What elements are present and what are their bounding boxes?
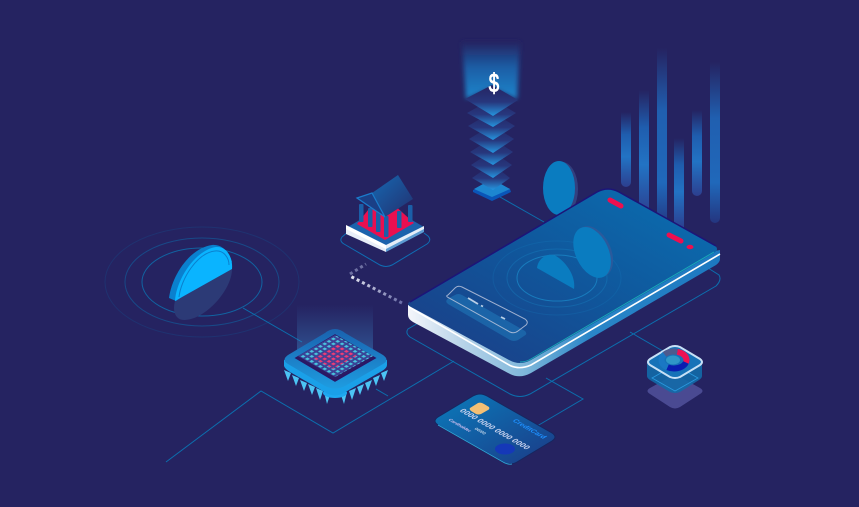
bank plate <box>341 232 430 266</box>
dotted arrow <box>350 264 402 303</box>
circuit lines <box>166 197 720 462</box>
chip display <box>296 335 375 381</box>
card expiry: 00/00 <box>473 427 488 435</box>
full coin on screen <box>566 220 621 284</box>
credit card <box>435 394 555 464</box>
input field <box>446 286 527 341</box>
tiers <box>473 183 511 201</box>
coin shadow <box>174 269 232 320</box>
bank <box>341 175 430 266</box>
card brand: CreditCard <box>510 418 548 440</box>
stacked tiers with dollar <box>462 42 520 201</box>
red indicators <box>610 200 694 249</box>
coin above phone <box>543 161 578 216</box>
dollar sign: $ <box>489 68 500 98</box>
bank columns <box>359 204 412 237</box>
bar chart columns <box>621 48 720 228</box>
left coin with rings <box>105 227 299 337</box>
card number: 0000 0000 0000 0000 <box>457 407 533 451</box>
CPU chip <box>284 305 388 404</box>
light beam <box>462 42 520 99</box>
phone edge <box>408 250 720 376</box>
chip pins <box>284 370 388 404</box>
card chip <box>470 403 489 414</box>
coin rim <box>169 245 232 301</box>
donut <box>662 352 686 368</box>
bank base <box>346 228 386 252</box>
card holder: Cardholder <box>447 418 473 433</box>
screen rings <box>493 241 621 315</box>
donut widget <box>647 346 702 408</box>
phone screen <box>408 189 717 363</box>
phone <box>408 189 720 376</box>
coin face <box>175 247 232 301</box>
bank roof <box>372 175 413 217</box>
card logo <box>495 444 515 454</box>
chip light beam <box>297 305 373 380</box>
half coin on screen <box>537 255 574 289</box>
